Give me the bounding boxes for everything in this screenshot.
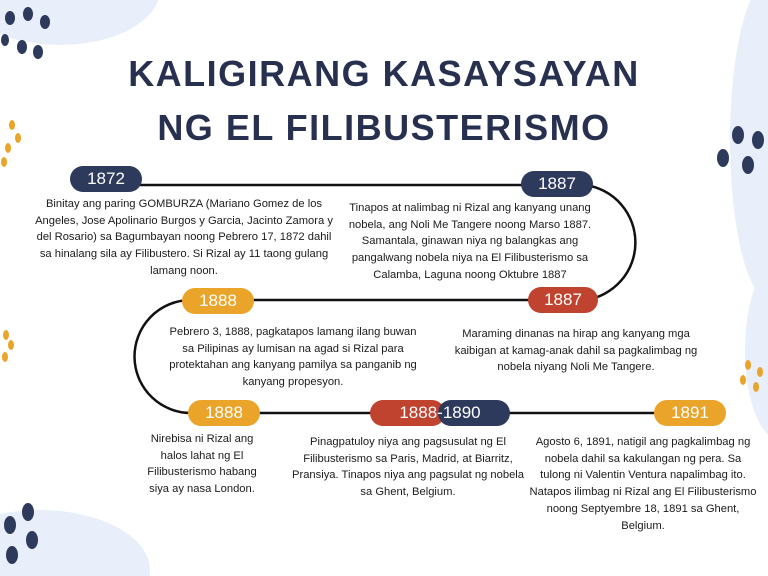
pill: 1887 red: [528, 287, 598, 313]
text: 1888: Pebrero 3, 1888, pagkatapos lamang ilang buwan sa Pilipinas ay lumisan na agad si Rizal para protektahan ang kanyang pamilya sa panganib ng kanyang propesyon.: [169, 326, 417, 388]
pill: 1888-1890: [370, 400, 510, 426]
pill: 1872: 1872: [87, 169, 125, 188]
title: [128, 53, 640, 148]
text: 1888 bottom: Nirebisa ni Rizal ang halos lahat ng El Filibusterismo habang siya ay nasa London.: [147, 433, 257, 495]
title: KALIGIRANG KASAYSAYAN: [128, 53, 640, 94]
pill: 1888: 1888: [199, 291, 237, 310]
pill: 1891: 1891: [671, 403, 709, 422]
pill: 1891: [654, 400, 726, 426]
text: 1888-1890: Pinagpatuloy niya ang pagsusulat ng El Filibusterismo sa Paris, Madrid, at Biarritz, Pransiya. Tinapos niya ang pagsulat ng nobela sa Ghent, Belgium.: [292, 436, 524, 498]
text: 1887 top: Tinapos at nalimbag ni Rizal ang kanyang unang nobela, ang Noli Me Tangere noong Marso 1887. Samantala, ginawan niya ng balangkas ang pangalwang nobela niya na El Filibusterismo sa Calamba, Laguna noong Oktubre 1887: [349, 202, 591, 281]
pill: 1887 top: 1887: [538, 174, 576, 193]
pill: 1887 red: 1887: [544, 290, 582, 309]
text: 1891: Agosto 6, 1891, natigil ang pagkalimbag ng nobela dahil sa kakulangan ng pera. Sa tulong ni Valentin Ventura napalimbag ito. Natapos ilimbag ni Rizal ang El Filibusterismo noong Septyembre 18, 1891 sa Ghent, Belgium.: [530, 436, 756, 532]
text: 1872: Binitay ang paring GOMBURZA (Mariano Gomez de los Angeles, Jose Apolinario Burgos y Garcia, Jacinto Zamora y del Rosario) sa Bagumbayan noong Pebrero 17, 1872 dahil sa hinalang sila ay Filibustero. Si Rizal ay 11 taong gulang lamang noon.: [35, 198, 333, 277]
title: NG EL FILIBUSTERISMO: [157, 107, 611, 148]
text: 1887 red: Maraming dinanas na hirap ang kanyang mga kaibigan at kamag-anak dahil sa pagkalimbag ng nobela niyang Noli Me Tangere.: [455, 328, 697, 373]
pill: 1888 bottom: [188, 400, 260, 426]
pill: 1872: [70, 166, 142, 192]
pill: 1888: [182, 288, 254, 314]
pill: 1888-1890: 1888-1890: [399, 403, 481, 422]
pill: 1887 top: [521, 171, 593, 197]
pill: 1888 bottom: 1888: [205, 403, 243, 422]
